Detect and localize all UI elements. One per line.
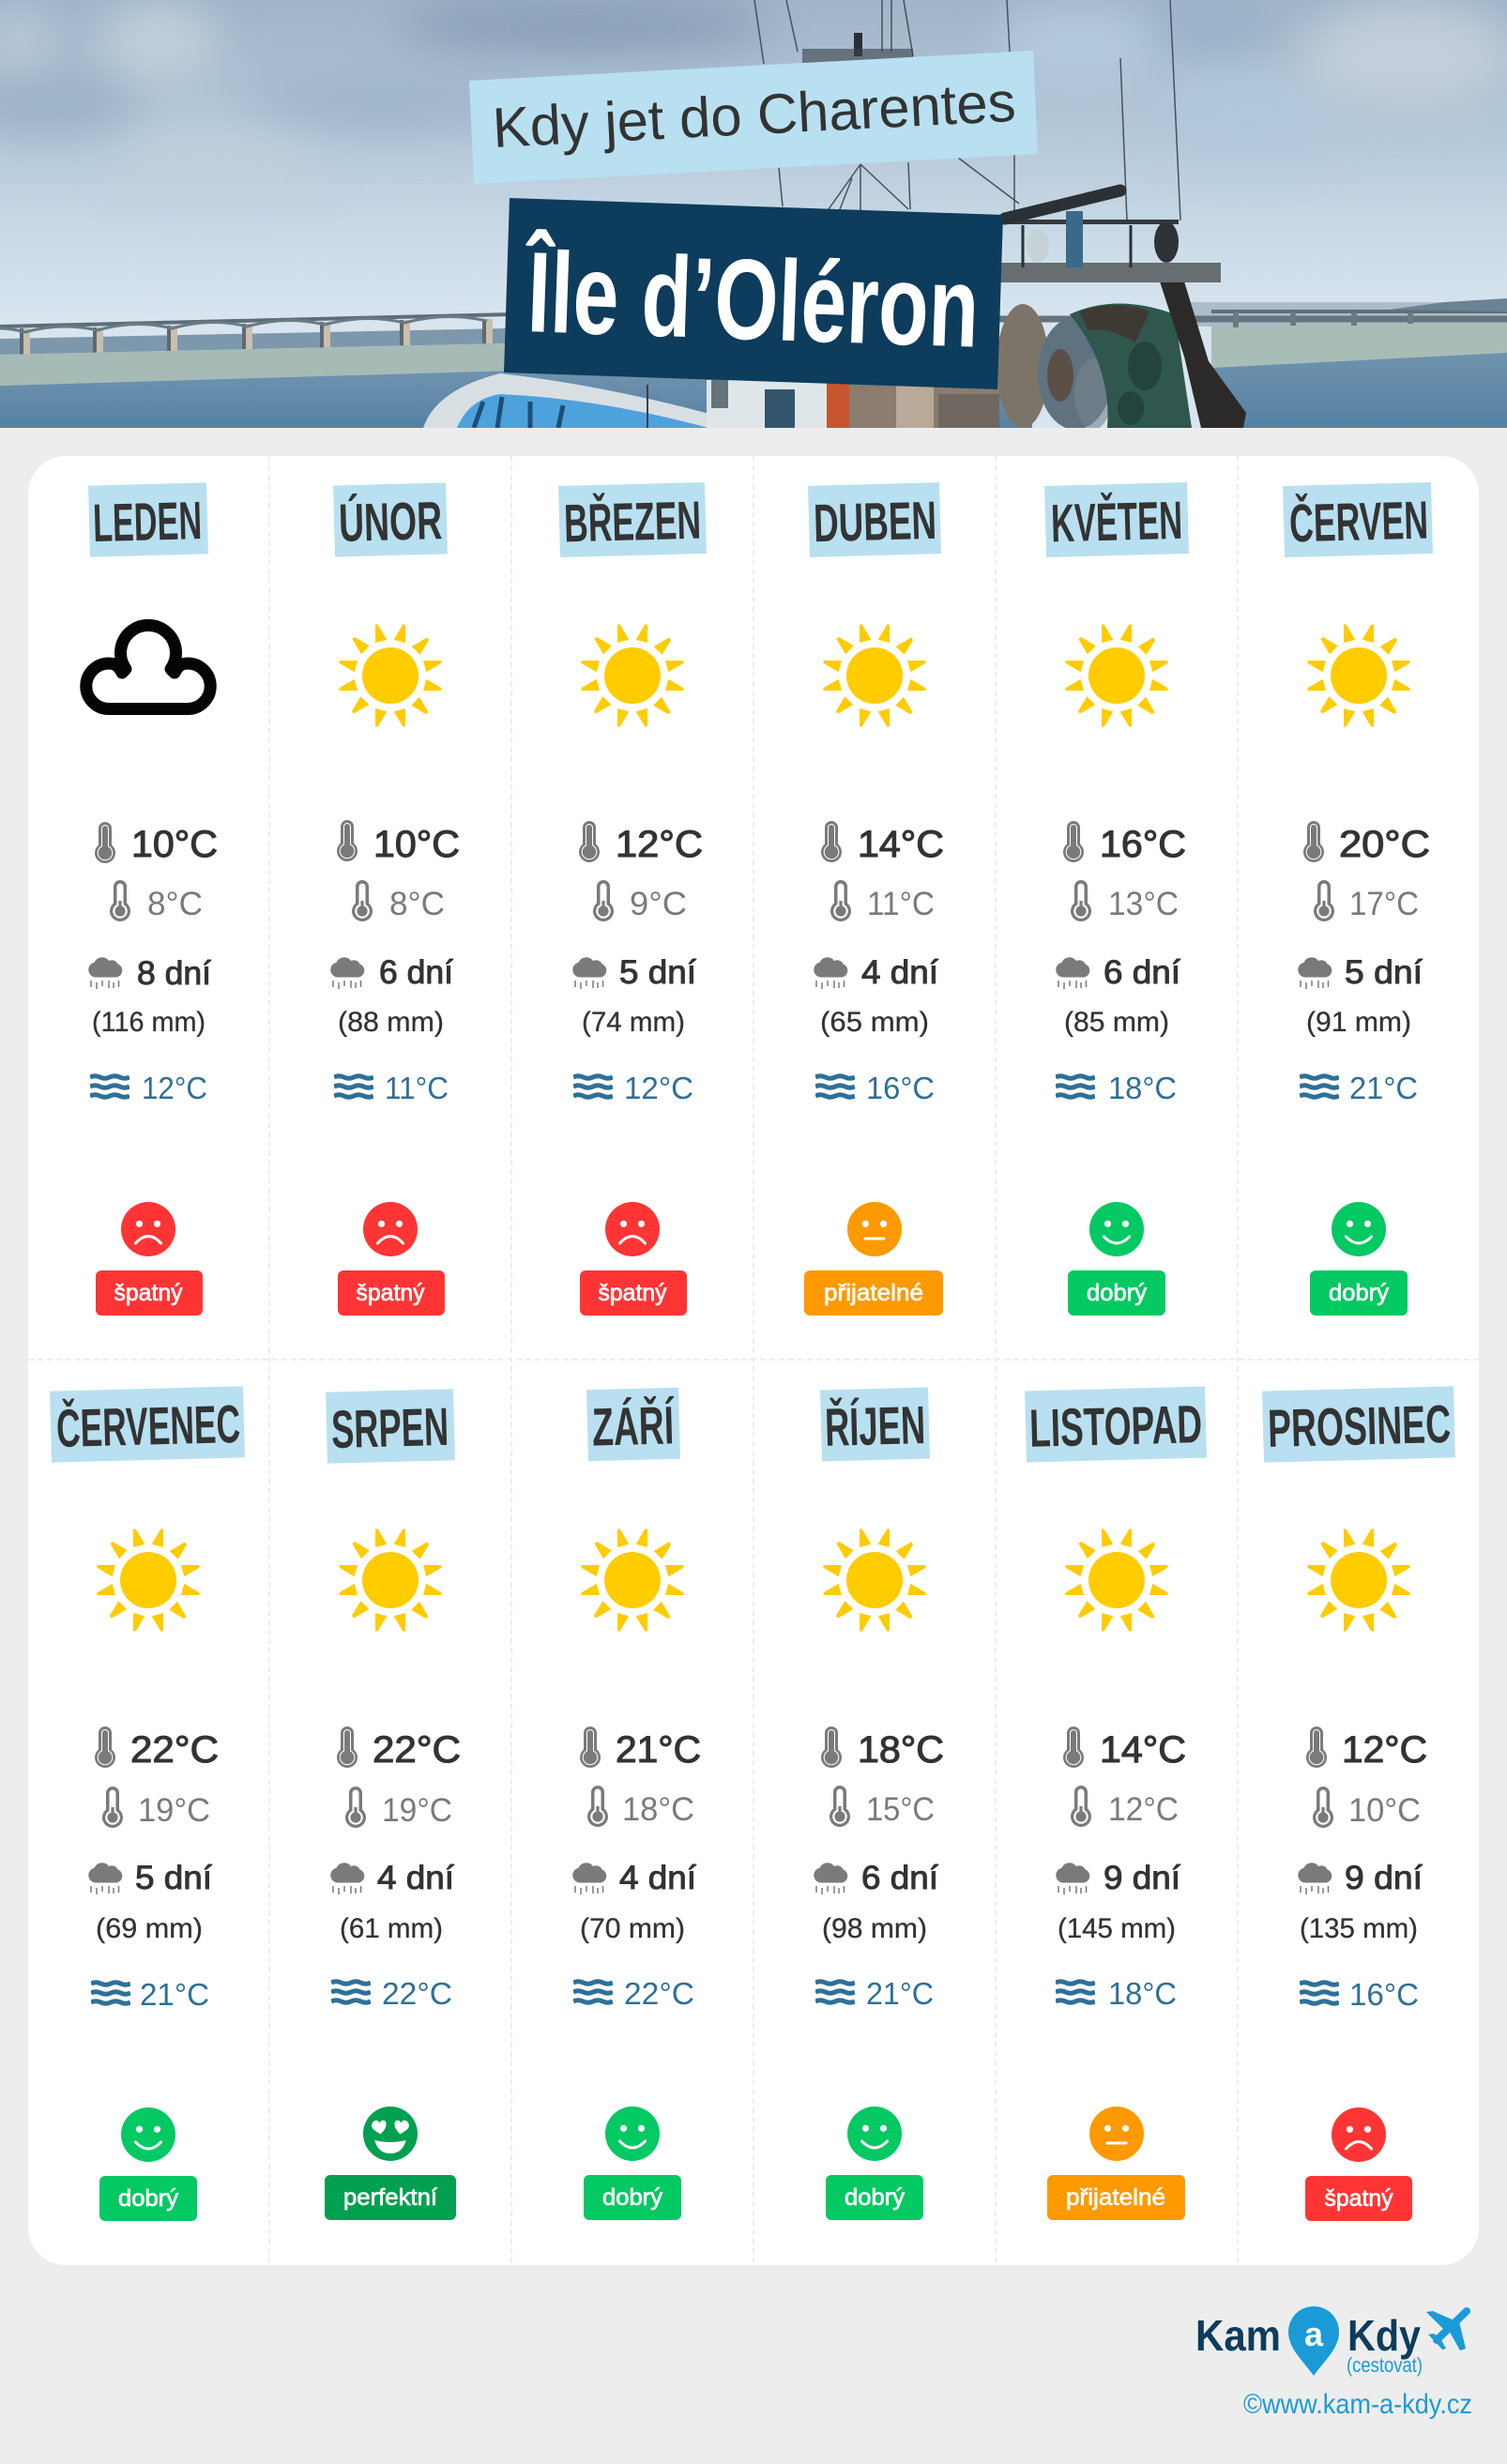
- min temperature: [1313, 1787, 1421, 1829]
- month heading: SRPEN: [330, 1397, 449, 1460]
- rating: perfektní: perfektní: [343, 2184, 437, 2211]
- max temperature: [337, 1726, 461, 1771]
- rainfall: (135 mm): [1300, 1913, 1418, 1944]
- logo: Kam a Kdy: a: [1304, 2315, 1324, 2353]
- rating: špatný: špatný: [357, 1280, 425, 1306]
- water temperature: [1300, 1977, 1419, 2012]
- rating: špatný: špatný: [1325, 2185, 1393, 2212]
- min temperature: 11°C: [867, 886, 935, 922]
- water temperature: 21°C: [1349, 1071, 1418, 1105]
- icon: sun: [1066, 1529, 1167, 1631]
- max temperature: 20°C: [1339, 824, 1430, 865]
- max temperature: 14°C: [858, 824, 944, 865]
- month heading: [1262, 1386, 1455, 1463]
- rating: špatný: [580, 1202, 687, 1316]
- max temperature: 14°C: [1100, 1729, 1186, 1771]
- rainy days: 6 dní: [861, 1860, 938, 1896]
- panel: monthly weather card: [28, 456, 1479, 2265]
- min temperature: 8°C: [389, 886, 445, 922]
- rating: dobrý: dobrý: [1087, 1280, 1148, 1306]
- logo: Kam a Kdy: Kam: [1195, 2311, 1281, 2360]
- max temperature: [337, 820, 460, 865]
- rainfall: (88 mm): [338, 1007, 444, 1038]
- rainy days: [1056, 1860, 1180, 1896]
- rainy days: 5 dní: [135, 1860, 212, 1896]
- rainfall: (85 mm): [1064, 1007, 1169, 1038]
- title strip: Kdy jet do Charentes: [469, 51, 1038, 184]
- water temperature: [334, 1071, 449, 1105]
- water temperature: [1056, 1976, 1177, 2011]
- min temperature: [110, 880, 203, 922]
- right shore: [1182, 302, 1507, 327]
- max temperature: [1303, 821, 1430, 865]
- rainfall: (145 mm): [1058, 1913, 1176, 1944]
- logo: Kam a Kdy: Kdy: [1347, 2311, 1421, 2360]
- min temperature: 10°C: [1348, 1792, 1421, 1829]
- icon: sun: [824, 1529, 925, 1631]
- life ring and machinery: [827, 380, 849, 428]
- icon: sun: [1308, 1529, 1409, 1631]
- min temperature: 8°C: [147, 886, 203, 922]
- max temperature: [1306, 1726, 1427, 1771]
- rating: špatný: [96, 1202, 203, 1316]
- max temperature: 12°C: [1342, 1729, 1427, 1771]
- shallow sand band: [0, 343, 511, 386]
- month heading: [88, 482, 208, 557]
- rating: přijatelné: přijatelné: [824, 1280, 923, 1306]
- month heading: [326, 1389, 455, 1464]
- min temperature: [830, 1786, 935, 1828]
- title strip: Île d'Oléron: Île d’Oléron: [522, 228, 982, 372]
- rating: špatný: špatný: [114, 1280, 183, 1306]
- icon: sun: [824, 625, 925, 726]
- water temperature: 22°C: [624, 1976, 694, 2011]
- rainy days: [88, 955, 211, 992]
- month heading: [1283, 482, 1433, 557]
- water temperature: [815, 1976, 934, 2011]
- month heading: [808, 482, 941, 557]
- rating: dobrý: [1068, 1202, 1165, 1316]
- min temperature: 12°C: [1108, 1791, 1179, 1828]
- water temperature: [815, 1071, 935, 1105]
- panel: LEDEN: [86, 482, 218, 1316]
- icon: sun: [582, 625, 683, 726]
- water temperature: [1300, 1071, 1418, 1105]
- rainy days: [1298, 954, 1423, 991]
- ship rear post: [1160, 281, 1246, 428]
- rating: dobrý: [826, 2107, 923, 2220]
- min temperature: [352, 880, 445, 922]
- max temperature: 22°C: [130, 1729, 219, 1771]
- rainy days: [1056, 954, 1180, 991]
- rating: dobrý: dobrý: [845, 2184, 906, 2211]
- water temperature: 18°C: [1108, 1071, 1177, 1105]
- rating: přijatelné: [1047, 2107, 1185, 2220]
- rainy days: 5 dní: [619, 954, 696, 991]
- water temperature: 12°C: [624, 1071, 693, 1105]
- winch drums: [997, 304, 1049, 428]
- water temperature: 12°C: [142, 1071, 207, 1105]
- title strip: Kdy jet do Charentes: Kdy jet do Charentes: [491, 70, 1017, 160]
- min temperature: [102, 1787, 210, 1829]
- month heading: KVĚTEN: [1050, 490, 1183, 554]
- max temperature: [95, 1726, 219, 1771]
- month heading: DUBEN: [813, 491, 937, 554]
- rainy days: [814, 1860, 938, 1896]
- fishing net: [1070, 304, 1192, 428]
- rating: špatný: špatný: [599, 1280, 667, 1306]
- panel: ZÁŘÍ: [572, 1388, 701, 2220]
- max temperature: [95, 822, 218, 865]
- max temperature: 12°C: [616, 824, 703, 865]
- logo: Kam a Kdy: (cestovat): [1347, 2353, 1423, 2377]
- rating: dobrý: [584, 2107, 681, 2220]
- rainy days: [330, 1860, 454, 1896]
- max temperature: [579, 821, 703, 865]
- month heading: [1025, 1387, 1207, 1462]
- panel: KVĚTEN: [1044, 482, 1189, 1316]
- month heading: [333, 482, 448, 557]
- min temperature: [1071, 880, 1179, 922]
- rating: dobrý: [99, 2107, 197, 2221]
- month heading: [820, 1387, 930, 1461]
- min temperature: 13°C: [1108, 886, 1179, 922]
- water temperature: [573, 1071, 693, 1105]
- min temperature: [1071, 1786, 1179, 1828]
- rating: dobrý: [1310, 1202, 1408, 1316]
- water temperature: [331, 1976, 452, 2011]
- rating: přijatelné: [804, 1202, 943, 1316]
- min temperature: [1314, 880, 1419, 922]
- min temperature: 18°C: [622, 1791, 694, 1828]
- water temperature: 16°C: [866, 1071, 935, 1105]
- water temperature: 11°C: [385, 1071, 449, 1105]
- icon: map pin: [1288, 2306, 1339, 2376]
- panel: LISTOPAD: [1025, 1387, 1207, 2220]
- rainy days: 5 dní: [1345, 954, 1423, 991]
- rainy days: [572, 1860, 696, 1896]
- max temperature: 10°C: [131, 824, 218, 865]
- month heading: BŘEZEN: [563, 490, 702, 554]
- rating: dobrý: dobrý: [1329, 1280, 1390, 1306]
- rainfall: (65 mm): [820, 1007, 929, 1038]
- rainy days: 4 dní: [619, 1860, 696, 1896]
- header photo: fishing boat and Oléron bridge: [0, 0, 1507, 430]
- panel: ČERVENEC: [50, 1386, 245, 2221]
- rating: perfektní: [325, 2107, 456, 2220]
- website credit: ©www.kam-a-kdy.cz: [1243, 2389, 1472, 2420]
- max temperature: [1063, 1726, 1186, 1771]
- min temperature: [593, 880, 687, 922]
- rainy days: [88, 1860, 212, 1896]
- water temperature: [90, 1071, 207, 1105]
- max temperature: [580, 1726, 701, 1771]
- max temperature: 21°C: [616, 1729, 701, 1771]
- rainy days: 6 dní: [379, 954, 453, 991]
- water temperature: 21°C: [140, 1977, 209, 2012]
- min temperature: [830, 880, 935, 922]
- max temperature: [821, 821, 944, 865]
- panel: ŘÍJEN: [814, 1387, 944, 2220]
- rating: špatný: [338, 1202, 445, 1316]
- month heading: ŘÍJEN: [824, 1394, 926, 1458]
- rainfall: (74 mm): [582, 1007, 685, 1038]
- rainy days: 4 dní: [861, 954, 938, 991]
- month heading: [50, 1386, 245, 1463]
- ship platform and frame: [995, 263, 1221, 282]
- water temperature: [573, 1976, 694, 2011]
- min temperature: 15°C: [866, 1791, 935, 1828]
- min temperature: 19°C: [138, 1792, 210, 1829]
- rainy days: 4 dní: [377, 1860, 454, 1896]
- panel: BŘEZEN: [558, 482, 707, 1316]
- min temperature: [345, 1787, 452, 1829]
- min temperature: [587, 1786, 694, 1828]
- water temperature: [91, 1977, 209, 2012]
- rainy days: [1298, 1860, 1423, 1896]
- month heading: ČERVEN: [1288, 490, 1429, 554]
- rating: dobrý: dobrý: [602, 2184, 663, 2211]
- month heading: LEDEN: [92, 491, 203, 554]
- water temperature: 21°C: [866, 1976, 934, 2011]
- water temperature: 18°C: [1108, 1976, 1177, 2011]
- ship cabin: [707, 380, 827, 428]
- rating: dobrý: dobrý: [118, 2185, 179, 2212]
- panel: ČERVEN: [1283, 482, 1433, 1316]
- month heading: LISTOPAD: [1028, 1394, 1203, 1459]
- rainy days: 9 dní: [1345, 1860, 1423, 1896]
- icon: sun: [98, 1529, 199, 1631]
- distant land, left: [0, 328, 507, 355]
- icon: airplane: [1426, 2311, 1467, 2350]
- icon: sun: [1066, 625, 1167, 726]
- rainy days: [330, 954, 453, 991]
- max temperature: 10°C: [373, 824, 460, 865]
- rainy days: 6 dní: [1104, 954, 1180, 991]
- rainy days: 8 dní: [137, 955, 211, 992]
- rainfall: (91 mm): [1306, 1007, 1411, 1038]
- month heading: ZÁŘÍ: [591, 1394, 676, 1458]
- water temperature: 16°C: [1349, 1977, 1419, 2012]
- logo: Kam a Kdy: [1195, 2306, 1467, 2377]
- month heading: ÚNOR: [338, 491, 443, 554]
- rainfall: (69 mm): [96, 1913, 203, 1944]
- panel: ÚNOR: [330, 482, 460, 1316]
- rating: špatný: [1305, 2107, 1412, 2221]
- panel: SRPEN: [325, 1389, 461, 2220]
- rainfall: (98 mm): [822, 1913, 927, 1944]
- max temperature: 18°C: [858, 1729, 944, 1771]
- min temperature: 19°C: [382, 1792, 452, 1829]
- panel: PROSINEC: [1262, 1386, 1455, 2221]
- masts and rigging: [754, 0, 1180, 221]
- rainfall: (70 mm): [580, 1913, 685, 1944]
- panel: DUBEN: [804, 482, 944, 1316]
- blue boat: [423, 373, 713, 428]
- max temperature: 16°C: [1100, 824, 1186, 865]
- title strip: Île d'Oléron: [504, 198, 1003, 389]
- month heading: [558, 482, 707, 557]
- rainfall: (116 mm): [92, 1007, 206, 1038]
- max temperature: [1063, 821, 1186, 865]
- icon: sun: [340, 1529, 441, 1631]
- rainy days: 9 dní: [1104, 1860, 1180, 1896]
- min temperature: 9°C: [630, 886, 687, 922]
- icon: sun: [340, 625, 441, 726]
- bridge left: [0, 314, 511, 355]
- max temperature: [821, 1726, 944, 1771]
- rainfall: (61 mm): [340, 1913, 443, 1944]
- rating: přijatelné: přijatelné: [1066, 2184, 1165, 2211]
- icon: cloud: [86, 625, 210, 709]
- max temperature: 22°C: [373, 1729, 461, 1771]
- icon: sun: [582, 1529, 683, 1631]
- rainy days: [572, 954, 696, 991]
- month heading: ČERVENEC: [55, 1393, 241, 1459]
- month heading: [1044, 482, 1189, 557]
- icon: sun: [1308, 625, 1409, 726]
- month heading: [586, 1388, 680, 1461]
- water temperature: 22°C: [382, 1976, 452, 2011]
- rainy days: [814, 954, 938, 991]
- min temperature: 17°C: [1349, 886, 1419, 922]
- water temperature: [1056, 1071, 1177, 1105]
- sea, left: [0, 371, 1032, 428]
